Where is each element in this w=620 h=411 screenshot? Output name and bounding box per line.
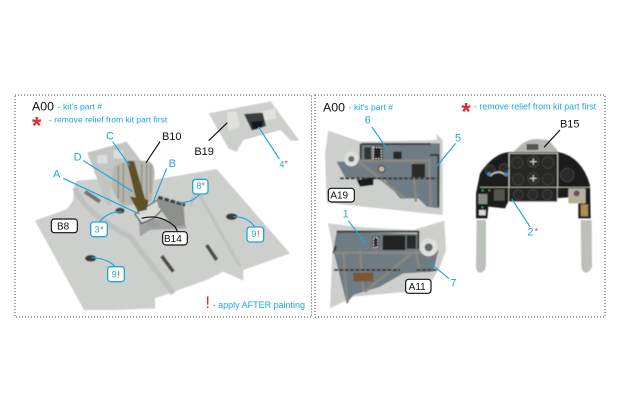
panel: right instrument panels bbox=[315, 95, 605, 317]
part: instrument panel B15 bbox=[476, 139, 592, 273]
note: apply after painting: ! bbox=[205, 293, 210, 312]
note: apply after painting: - apply AFTER painting bbox=[213, 300, 305, 310]
label box: B14 bbox=[163, 232, 187, 245]
labels: part numbers: B15 bbox=[560, 119, 580, 131]
arrow lines: seat labels bbox=[63, 123, 279, 233]
part: side panel A19 bbox=[325, 131, 443, 215]
labels: seat letters: B bbox=[169, 158, 176, 170]
callout: 3 star: * bbox=[100, 225, 103, 234]
label: 2 star bbox=[527, 226, 539, 238]
legend: remove relief: * bbox=[32, 112, 42, 139]
label box: A11 bbox=[406, 279, 431, 293]
labels: part numbers: 5 bbox=[455, 132, 461, 144]
note: apply after painting bbox=[205, 293, 305, 312]
legend: kit part number: - kit's part # bbox=[349, 102, 393, 112]
label: 4 star bbox=[279, 160, 288, 170]
label box: A19: A19 bbox=[330, 191, 349, 202]
label box: A19 bbox=[328, 188, 354, 202]
legend: kit part number: A00 bbox=[32, 100, 54, 114]
callout: 9 right: 9 bbox=[251, 229, 256, 239]
labels: part numbers: 6 bbox=[365, 115, 371, 127]
label: 4 star: 4 bbox=[279, 160, 284, 170]
legend: kit part number bbox=[323, 101, 393, 115]
legend: kit part number: - kit's part # bbox=[58, 101, 102, 111]
labels: part numbers: 7 bbox=[450, 277, 456, 289]
label box: B8 bbox=[51, 219, 77, 233]
legend: remove relief: - remove relief from kit part first bbox=[49, 115, 168, 125]
legend: kit part number: A00 bbox=[323, 101, 345, 115]
callout: 3 star bbox=[91, 212, 122, 237]
panel: left seat assembly bbox=[15, 95, 312, 317]
labels: part numbers: 1 bbox=[343, 209, 349, 221]
labels: seat letters: B10 bbox=[162, 131, 182, 143]
legend: remove relief: * bbox=[461, 99, 471, 126]
label: 2 star: * bbox=[535, 226, 539, 236]
part: seat back B10 bbox=[87, 142, 155, 212]
legend: remove relief: - remove relief from kit part first bbox=[474, 102, 597, 112]
legend: remove relief bbox=[32, 112, 168, 139]
label box: B8: B8 bbox=[57, 221, 70, 232]
labels: seat letters: C bbox=[106, 130, 114, 142]
part: floor plate B8 bbox=[35, 169, 290, 310]
labels: seat letters: B19 bbox=[194, 146, 214, 158]
callout: 8 star: * bbox=[202, 182, 205, 191]
legend: kit part number bbox=[32, 100, 102, 114]
legend: remove relief bbox=[461, 99, 597, 126]
label box: A11: A11 bbox=[409, 282, 426, 293]
callout: 9 lower bbox=[92, 258, 124, 282]
labels: seat letters bbox=[53, 130, 214, 180]
labels: seat letters: D bbox=[74, 151, 82, 163]
arrow lines: panel labels bbox=[348, 127, 560, 279]
callout: 9 right: ! bbox=[257, 229, 259, 239]
callout: 9 lower: ! bbox=[117, 269, 120, 279]
labels: seat letters: A bbox=[53, 168, 61, 180]
callout: 3 star: 3 bbox=[95, 225, 100, 235]
label box: B14: B14 bbox=[164, 234, 182, 245]
callout: 8 star: 8 bbox=[196, 181, 201, 191]
callout: 9 lower: 9 bbox=[112, 269, 117, 279]
label: 2 star: 2 bbox=[527, 226, 533, 238]
labels: part numbers bbox=[343, 115, 580, 289]
part: B19 small bracket bbox=[209, 101, 299, 152]
callout: 9 right bbox=[233, 217, 264, 242]
part: seat bracket and lever B14 bbox=[130, 197, 185, 228]
label: 4 star: * bbox=[285, 160, 288, 169]
part: side panel A11 bbox=[328, 221, 446, 308]
callout: 8 star bbox=[178, 179, 208, 202]
